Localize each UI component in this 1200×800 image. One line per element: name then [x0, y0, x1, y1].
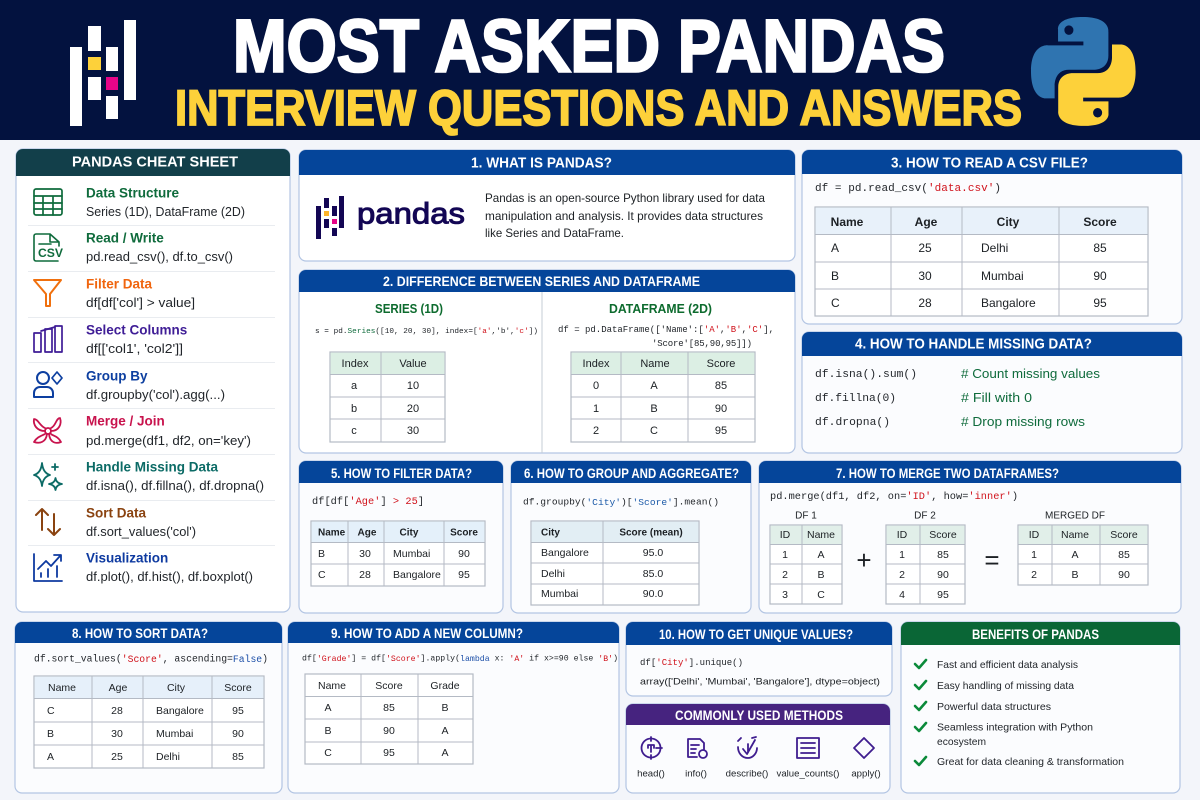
heading: methods: COMMONLY USED METHODS: [675, 707, 843, 723]
label: apply: apply(): [851, 768, 881, 780]
table: series: a: [351, 380, 358, 392]
cheat item: data structure: Data Structure: [86, 186, 180, 200]
table: group: 95.0: [643, 547, 663, 559]
icon: describe: [738, 737, 757, 758]
heading: merge: 7. HOW TO MERGE TWO DATAFRAMES?: [836, 465, 1059, 481]
icon: csv file: CSV: [38, 246, 63, 260]
table: new column: [305, 674, 473, 764]
table: df 2: 2: [899, 569, 905, 581]
table: new column: Score: [375, 680, 403, 692]
table: df 2: 1: [899, 549, 905, 561]
table: group: City: [541, 528, 560, 538]
table: read csv: City: [997, 215, 1020, 229]
cheat item: select columns: [86, 322, 187, 356]
cheat item: handle missing data: [86, 460, 264, 493]
code: series: s = pd.Series([10, 20, 30], index=['a','b','c']): [315, 328, 538, 336]
cheat item: merge join: Merge / Join: [86, 414, 165, 428]
icon: sparkles: [34, 463, 62, 490]
plus sign: +: [856, 545, 872, 575]
cheat item: data structure: Series (1D), DataFrame (2D): [86, 205, 245, 219]
heading: missing data: 4. HOW TO HANDLE MISSING DATA?: [855, 336, 1092, 352]
table: df 1: Name: [807, 529, 835, 541]
heading: filter: 5. HOW TO FILTER DATA?: [331, 465, 472, 481]
heading: new column: 9. HOW TO ADD A NEW COLUMN?: [331, 625, 523, 641]
icon: funnel: [34, 280, 61, 306]
panel: merge dataframes: [759, 461, 1181, 613]
table: sort: Bangalore: [156, 705, 204, 717]
table: df 1: A: [817, 549, 825, 561]
table: df 1: ID: [780, 529, 791, 541]
table: df 2: Score: [929, 529, 957, 541]
code: missing data: df.isna().sum(): [815, 369, 917, 381]
table: sort: 95: [232, 705, 244, 717]
table: new column: B: [324, 725, 332, 737]
code: merge: pd.merge(df1, df2, on='ID', how='inner'): [770, 491, 1018, 503]
description text: Pandas is an open-source Python library used for data: [485, 191, 765, 205]
table: sort: Age: [109, 682, 127, 694]
table: dataframe: 95: [715, 425, 727, 437]
table: merged df: 2: [1031, 569, 1037, 581]
cheat item: read write: pd.read_csv(), df.to_csv(): [86, 250, 233, 264]
icon: table: [34, 189, 62, 215]
code: unique: [640, 658, 880, 688]
cheat item: sort data: Sort Data: [86, 506, 147, 520]
label: describe: describe(): [726, 768, 768, 780]
icon: columns: [34, 326, 62, 352]
wordmark: pandas: pandas: [357, 198, 465, 230]
panel: read a csv file: [802, 150, 1182, 324]
table: df 1: DF 1: [795, 510, 817, 522]
cheat item: merge join: [86, 414, 251, 448]
table: series: Value: [399, 358, 427, 370]
label: value counts: value_counts(): [777, 768, 839, 780]
benefit: missing data: Easy handling of missing data: [937, 680, 1074, 692]
table: group: Delhi: [541, 568, 565, 580]
table: merged df: ID: [1029, 529, 1040, 541]
table: merged df: Score: [1110, 529, 1138, 541]
panel: sort data: [15, 622, 282, 793]
benefit: cleaning: Great for data cleaning & transformation: [937, 756, 1124, 768]
icon: group: [34, 372, 62, 397]
code: unique: df['City'].unique(): [640, 658, 743, 668]
cheat item: handle missing data: df.isna(), df.fillna(), df.dropna(): [86, 479, 264, 493]
table: read csv: [815, 207, 1148, 316]
benefit: python ecosystem: [915, 722, 1093, 748]
table: series: c: [351, 425, 357, 437]
table: df 1: 1: [782, 549, 788, 561]
table: series: 30: [407, 425, 419, 437]
table: filter: B: [318, 548, 325, 560]
table: sort: 90: [232, 728, 244, 740]
table: df 1: C: [817, 589, 825, 601]
heading: read csv: 3. HOW TO READ A CSV FILE?: [891, 154, 1088, 172]
panel: group and aggregate: [511, 461, 751, 613]
code: filter: df[df['Age'] > 25]: [312, 496, 424, 508]
table: read csv: 85: [1093, 241, 1107, 255]
subheading: dataframe: DATAFRAME (2D): [609, 302, 712, 316]
icon: info: [688, 739, 707, 758]
table: new column: A: [441, 725, 449, 737]
cheat item: sort data: df.sort_values('col'): [86, 525, 196, 539]
table: read csv: Age: [915, 215, 938, 229]
table: filter: 90: [458, 548, 470, 560]
table: filter: 30: [359, 548, 371, 560]
cheat item: visualization: df.plot(), df.hist(), df.boxplot(): [86, 570, 253, 584]
table: new column: A: [441, 747, 449, 759]
table: filter: 28: [359, 569, 371, 581]
table: sort: Mumbai: [156, 728, 193, 740]
table: sort: 85: [232, 751, 244, 763]
table: dataframe: A: [650, 380, 658, 392]
table: filter: [311, 521, 485, 586]
table: df 2: DF 2: [914, 510, 936, 522]
table: group: Score (mean): [619, 528, 683, 538]
table: new column: 85: [383, 702, 395, 714]
icon: apply: [854, 738, 874, 758]
table: read csv: 90: [1093, 269, 1107, 283]
code: missing data: df.fillna(0): [815, 393, 896, 405]
code: sort: df.sort_values('Score', ascending=False): [34, 654, 268, 664]
cheat item: filter data: df[df['col'] > value]: [86, 296, 195, 310]
table: dataframe: C: [650, 425, 658, 437]
heading: benefits: BENEFITS OF PANDAS: [972, 626, 1099, 642]
subheading: series: SERIES (1D): [375, 302, 443, 316]
cheat item: select columns: Select Columns: [86, 322, 187, 338]
table: dataframe: 0: [593, 380, 599, 392]
table: filter: Score: [450, 528, 478, 538]
panel: add new column: [288, 622, 619, 793]
icon: python logo: [1031, 17, 1136, 126]
benefit: fast: Fast and efficient data analysis: [937, 659, 1078, 671]
table: filter: 95: [458, 569, 470, 581]
panel: what is pandas: [299, 150, 795, 261]
table: sort: A: [47, 751, 54, 763]
table: sort: B: [47, 728, 54, 740]
table: new column: Name: [318, 680, 346, 692]
table: dataframe: B: [650, 403, 658, 415]
code: dataframe: 'Score'[85,90,95]]): [652, 339, 752, 349]
code: missing data: df.dropna(): [815, 417, 890, 429]
table: df 2: [886, 510, 965, 604]
code: new column: df['Grade'] = df['Score'].apply(lambda x: 'A' if x>=90 else 'B'): [302, 654, 618, 664]
cheat item: data structure: [86, 186, 245, 219]
table: filter: City: [400, 528, 419, 538]
heading: group: 6. HOW TO GROUP AND AGGREGATE?: [524, 465, 739, 481]
table: dataframe: Name: [640, 358, 670, 370]
table: df 2: 95: [937, 589, 949, 601]
cheat item: read write: Read / Write: [86, 230, 164, 246]
code: read csv: df = pd.read_csv('data.csv'): [815, 183, 1001, 195]
table: dataframe: 2: [593, 425, 599, 437]
heading: sort: 8. HOW TO SORT DATA?: [72, 625, 208, 641]
table: read csv: B: [831, 269, 839, 283]
description text: like Series and DataFrame.: [485, 226, 624, 240]
table: df 1: 3: [782, 589, 788, 601]
table: new column: Grade: [430, 680, 460, 692]
table: filter: Age: [358, 528, 377, 538]
icon: pandas logo white: [70, 20, 136, 126]
table: sort: 28: [111, 705, 123, 717]
benefit: python ecosystem: Seamless integration with Python: [937, 722, 1093, 734]
table: series: [330, 352, 445, 442]
cheat item: visualization: [86, 550, 253, 584]
code: missing data: # Drop missing rows: [961, 415, 1085, 429]
table: read csv: 25: [918, 241, 932, 255]
cheat item: read write: [86, 230, 233, 264]
table: series: Index: [342, 358, 369, 370]
table: df 1: [770, 510, 842, 604]
cheat item: sort data: [86, 506, 196, 539]
table: sort: C: [47, 705, 55, 717]
icon: pandas logo: [316, 196, 344, 239]
cheat item: group by: [86, 368, 225, 402]
benefit: data structures: Powerful data structures: [937, 701, 1051, 713]
panel: commonly used methods: [626, 704, 890, 793]
table: group: [531, 521, 699, 605]
title: MOST ASKED PANDAS: [233, 4, 945, 88]
table: merged df: 1: [1031, 549, 1037, 561]
icon: merge: [34, 418, 61, 443]
table: read csv: Name: [831, 215, 864, 229]
table: read csv: Bangalore: [981, 296, 1036, 310]
cheat item: merge join: pd.merge(df1, df2, on='key'): [86, 434, 251, 448]
table: df 1: 2: [782, 569, 788, 581]
icon: chart: [34, 554, 62, 581]
icon: sort arrows: [36, 509, 60, 535]
table: new column: B: [441, 702, 449, 714]
cheat item: select columns: df[['col1', 'col2']]: [86, 342, 183, 356]
equals sign: =: [984, 545, 1000, 575]
table: dataframe: Index: [583, 358, 610, 370]
heading: unique: 10. HOW TO GET UNIQUE VALUES?: [659, 626, 853, 642]
icon: csv file: [34, 234, 63, 261]
table: sort: Delhi: [156, 751, 180, 763]
table: read csv: 30: [918, 269, 932, 283]
table: filter: C: [318, 569, 326, 581]
table: read csv: 95: [1093, 296, 1107, 310]
table: group: 90.0: [643, 588, 663, 600]
icon: head: [642, 737, 662, 759]
table: filter: Bangalore: [393, 569, 441, 581]
table: filter: Mumbai: [393, 548, 430, 560]
table: group: Bangalore: [541, 547, 589, 559]
table: series: 10: [407, 380, 419, 392]
panel: benefits of pandas: [901, 622, 1180, 793]
table: sort: [34, 676, 264, 768]
table: new column: C: [324, 747, 332, 759]
table: sort: Score: [224, 682, 252, 694]
code: dataframe: [558, 325, 774, 349]
benefit: python ecosystem: ecosystem: [937, 736, 986, 748]
table: df 2: 85: [937, 549, 949, 561]
header banner: [0, 0, 1200, 140]
cheat item: visualization: Visualization: [86, 550, 168, 566]
table: read csv: Mumbai: [981, 269, 1024, 283]
panel: handle missing data: [802, 332, 1182, 453]
cheat item: handle missing data: Handle Missing Data: [86, 460, 219, 474]
table: group: 85.0: [643, 568, 663, 580]
code: missing data: # Fill with 0: [961, 391, 1032, 405]
table: series: b: [351, 403, 357, 415]
panel: filter data: [299, 461, 503, 613]
heading: what is pandas: 1. WHAT IS PANDAS?: [471, 154, 612, 172]
heading: difference: 2. DIFFERENCE BETWEEN SERIES AND DATAFRAME: [383, 273, 700, 289]
table: dataframe: [571, 352, 755, 442]
table: sort: 30: [111, 728, 123, 740]
table: merged df: [1018, 510, 1148, 585]
icon: value counts: [797, 738, 819, 758]
table: new column: A: [324, 702, 332, 714]
cheat item: group by: Group By: [86, 368, 148, 384]
table: dataframe: 90: [715, 403, 727, 415]
panel: pandas cheat sheet: [16, 149, 290, 612]
code: group: df.groupby('City')['Score'].mean(): [523, 496, 719, 508]
table: merged df: MERGED DF: [1045, 510, 1105, 522]
table: dataframe: 1: [593, 403, 599, 415]
table: read csv: 28: [918, 296, 932, 310]
table: merged df: 90: [1118, 569, 1130, 581]
label: head: head(): [637, 768, 665, 780]
cheat item: group by: df.groupby('col').agg(...): [86, 388, 225, 402]
table: read csv: Score: [1083, 215, 1117, 229]
table: sort: City: [167, 682, 186, 694]
table: new column: 95: [383, 747, 395, 759]
panel: series vs dataframe: [299, 270, 795, 453]
subtitle: INTERVIEW QUESTIONS AND ANSWERS: [175, 80, 1022, 136]
code: unique: array(['Delhi', 'Mumbai', 'Bangalore'], dtype=object): [640, 676, 880, 688]
table: group: Mumbai: [541, 588, 578, 600]
code: missing data: # Count missing values: [961, 367, 1100, 381]
table: sort: Name: [48, 682, 76, 694]
table: merged df: 85: [1118, 549, 1130, 561]
table: read csv: Delhi: [981, 241, 1008, 255]
label: info: info(): [685, 768, 707, 780]
cheat item: filter data: Filter Data: [86, 276, 153, 292]
table: df 1: B: [817, 569, 825, 581]
code: dataframe: df = pd.DataFrame(['Name':['A','B','C'],: [558, 325, 774, 335]
table: read csv: A: [831, 241, 839, 255]
heading: cheat sheet: PANDAS CHEAT SHEET: [72, 154, 238, 170]
table: filter: Name: [318, 528, 346, 538]
table: merged df: A: [1071, 549, 1079, 561]
table: df 2: 4: [899, 589, 905, 601]
table: read csv: C: [831, 296, 840, 310]
code: missing data: [815, 367, 1100, 429]
table: merged df: Name: [1061, 529, 1089, 541]
table: dataframe: 85: [715, 380, 727, 392]
table: sort: 25: [111, 751, 123, 763]
table: merged df: B: [1071, 569, 1079, 581]
table: new column: 90: [383, 725, 395, 737]
table: df 2: ID: [897, 529, 908, 541]
description text: manipulation and analysis. It provides data structures: [485, 209, 763, 223]
table: df 2: 90: [937, 569, 949, 581]
table: dataframe: Score: [707, 358, 735, 370]
description text: [485, 191, 765, 240]
table: series: 20: [407, 403, 419, 415]
panel: unique values: [626, 622, 892, 696]
cheat item: filter data: [86, 276, 195, 310]
